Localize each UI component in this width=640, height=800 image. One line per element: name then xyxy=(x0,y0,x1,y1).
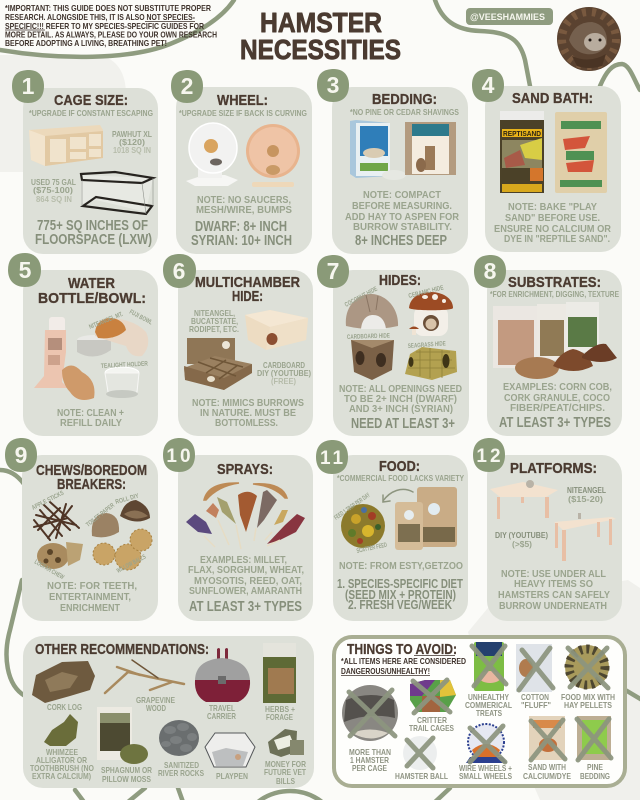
note: NOTE: COMPACT xyxy=(363,189,442,201)
badge 5: 5 xyxy=(19,257,32,283)
image: food pouches xyxy=(395,487,457,550)
heading xyxy=(38,275,146,307)
label: brands: BUCATSTATE, xyxy=(191,316,238,326)
subnote: *ALL ITEMS HERE ARE CONSIDERED xyxy=(341,657,466,666)
label: used tank xyxy=(31,177,76,204)
note: NOTE: MIMICS BURROWS xyxy=(192,397,304,409)
label: used tank: ($75-100) xyxy=(33,185,73,195)
note: NOTE: USE UNDER ALL xyxy=(501,568,606,580)
note: DYE IN "REPTILE SAND". xyxy=(504,233,610,245)
panel: 7 hides xyxy=(317,255,469,436)
label: money: FUTURE VET xyxy=(264,767,307,777)
key takeaway: FLOORSPACE (LXW) xyxy=(35,232,152,248)
label: treats xyxy=(465,692,512,718)
note xyxy=(188,554,304,597)
hide labels: COCONUT HIDE xyxy=(344,285,379,309)
label: carrier xyxy=(207,703,236,721)
note xyxy=(192,397,304,429)
label: grapevine: GRAPEVINE xyxy=(136,695,175,705)
image: play sand bag xyxy=(555,112,607,193)
badge 12: 12 xyxy=(476,446,504,467)
diet list: (SEED MIX + PROTEIN) xyxy=(345,588,456,602)
hide labels xyxy=(344,284,447,350)
heading: CHEWS/BOREDOM xyxy=(36,462,147,479)
label: wire wheels: WIRE WHEELS + xyxy=(459,763,512,773)
key takeaway: AT LEAST 3+ TYPES xyxy=(499,415,611,431)
badge 9: 9 xyxy=(15,442,27,468)
note: NOTE: CLEAN + xyxy=(57,407,124,419)
note: TO BE 2+ INCH (DWARF) xyxy=(344,393,457,405)
image: cardboard dividers xyxy=(184,338,252,390)
intro disclaimer text: SPECIFIC!!! REFER TO MY SPECIES-SPECIFIC GUIDES FOR xyxy=(5,22,204,31)
label: treats: UNHEALTHY xyxy=(468,692,509,702)
note: CORK GRANULE, COCO xyxy=(504,392,610,404)
badge 3: 3 xyxy=(327,72,339,98)
note: EXAMPLES: MILLET, xyxy=(200,554,287,566)
image: river rocks xyxy=(159,720,199,756)
subnote: *UPGRADE SIZE IF BACK IS CURVING xyxy=(179,108,307,118)
label: ball: HAMSTER BALL xyxy=(395,771,448,781)
label: money: MONEY FOR xyxy=(265,759,306,769)
label: more than one: PER CAGE xyxy=(352,763,387,773)
badge 3 xyxy=(317,69,349,102)
heading: CAGE SIZE: xyxy=(54,92,128,109)
panel: 9 chews xyxy=(5,438,158,621)
image: tealight holder xyxy=(105,367,139,398)
label: cardboard diy xyxy=(257,360,311,386)
label: cotton: COTTON xyxy=(521,692,549,702)
title: HAMSTER xyxy=(260,7,382,38)
heading: FOOD: xyxy=(379,458,420,475)
intro disclaimer text: *IMPORTANT: THIS GUIDE DOES NOT SUBSTITUTE PROPER xyxy=(5,4,211,13)
image: apple sticks xyxy=(34,502,79,540)
key takeaway: 775+ SQ INCHES OF xyxy=(37,218,148,234)
label: cotton: "FLUFF" xyxy=(521,700,551,710)
heading: WHEEL: xyxy=(217,92,268,109)
crossed item: hamster ball xyxy=(403,736,437,770)
heading: THINGS TO AVOID: xyxy=(347,641,457,658)
image: millet and grass sprays xyxy=(186,483,305,549)
label: moss xyxy=(101,765,152,784)
crossed item: multiple hamsters xyxy=(342,685,398,741)
label: pawhut: 1018 SQ IN xyxy=(113,145,151,155)
image: whimzee alligator xyxy=(44,714,78,746)
label: used tank: 864 SQ IN xyxy=(36,194,72,204)
note: MYOSOTIS, REED, OAT, xyxy=(194,575,302,587)
badge 8: 8 xyxy=(484,258,497,284)
hide labels: CARDBOARD HIDE xyxy=(347,332,391,341)
label: playpen: PLAYPEN xyxy=(216,771,248,781)
label: money xyxy=(264,759,307,786)
label: sand xyxy=(523,762,571,781)
intro disclaimer text: RESEARCH. ALONGSIDE THIS, IT IS ALSO NOT SPECIES- xyxy=(5,13,195,22)
label: cardboard diy: (FREE) xyxy=(271,376,296,386)
image: cork log xyxy=(32,661,95,703)
image: moss bag xyxy=(97,707,148,764)
image: reptisand bag: REPTISAND xyxy=(503,131,541,138)
image: paper bedding box xyxy=(350,120,406,180)
image: diy platform xyxy=(554,513,616,561)
label: brands xyxy=(189,308,239,334)
image: aspen bedding box xyxy=(405,122,456,175)
note: SUNFLOWER, AMARANTH xyxy=(189,585,302,597)
heading: OTHER RECOMMENDATIONS: xyxy=(35,641,209,658)
image: playpen xyxy=(205,733,255,767)
label: diy xyxy=(495,530,548,549)
badge 7: 7 xyxy=(327,258,339,284)
note xyxy=(57,407,124,429)
image: wooden wheel xyxy=(246,124,300,187)
image: bowl xyxy=(77,335,111,357)
note: NOTE: FROM ESTY,GETZOO xyxy=(339,560,463,572)
label: whimzee: ALLIGATOR OR xyxy=(36,755,87,765)
label: pine: PINE xyxy=(587,762,603,772)
key takeaway: SYRIAN: 10+ INCH xyxy=(191,233,292,249)
image: mushroom hide xyxy=(409,292,453,336)
note: BURROW STABILITY. xyxy=(353,221,452,233)
item labels: APPLE STICKS xyxy=(31,489,66,512)
label: grapevine xyxy=(136,695,175,713)
image: hamster at bowl xyxy=(95,318,148,356)
label: niteangel xyxy=(567,485,606,504)
label: cardboard diy: CARDBOARD xyxy=(263,360,305,370)
image: substrate piles xyxy=(515,344,617,379)
label: niteangel: ($15-20) xyxy=(568,494,603,504)
key takeaway: NEED AT LEAST 3+ xyxy=(351,416,455,432)
crossed item: calcium sand xyxy=(529,716,565,760)
note: NOTE: BAKE "PLAY xyxy=(508,201,597,213)
badge 11: 11 xyxy=(320,448,346,469)
diet list: 2. FRESH VEG/WEEK xyxy=(348,598,452,612)
label: tealight: TEALIGHT HOLDER xyxy=(101,361,148,370)
crossed item: cotton fluff xyxy=(516,644,553,692)
badge 7 xyxy=(317,255,349,288)
note xyxy=(345,189,459,233)
label: wire wheels: SMALL WHEELS xyxy=(459,771,512,781)
label: food mix: HAY PELLETS xyxy=(564,700,612,710)
note xyxy=(503,381,612,414)
badge 2 xyxy=(171,70,203,103)
label: diy: (>$5) xyxy=(512,539,532,549)
diet list: 1. SPECIES-SPECIFIC DIET xyxy=(337,577,463,591)
label: brands: NITEANGEL, xyxy=(194,308,235,318)
title xyxy=(240,7,401,65)
image: glass tank xyxy=(81,172,153,214)
label: more than one: MORE THAN xyxy=(349,747,391,757)
subnote: *UPGRADE IF CONSTANT ESCAPING xyxy=(29,108,153,118)
heading xyxy=(36,462,147,493)
badge 6 xyxy=(163,254,196,288)
label: food mix xyxy=(561,692,615,710)
label: herbs xyxy=(265,704,295,722)
handle tag: @VEESHAMMIES xyxy=(470,12,545,22)
label: cotton xyxy=(521,692,551,710)
heading: BOTTLE/BOWL: xyxy=(38,290,146,307)
badge 5 xyxy=(8,253,41,287)
heading: WATER xyxy=(68,275,115,292)
image: coconut hide xyxy=(346,294,398,329)
image: substrate bags xyxy=(493,302,599,368)
crossed item: wire wheel xyxy=(466,724,507,763)
label: scatter feed: SCATTER FEED xyxy=(356,542,388,555)
image: reptisand bag xyxy=(500,111,544,193)
note: NOTE: ALL OPENINGS NEED xyxy=(339,383,462,395)
title: NECESSITIES xyxy=(240,34,401,65)
panel: 3 bedding xyxy=(317,69,468,254)
note: EXAMPLES: CORN COB, xyxy=(503,381,612,393)
panel: 1 cage size xyxy=(12,70,158,254)
note: BURROW UNDERNEATH xyxy=(499,600,607,612)
heading: MULTICHAMBER xyxy=(195,274,300,291)
label: whimzee: EXTRA CALCIUM) xyxy=(32,771,91,781)
note: ENSURE NO CALCIUM OR xyxy=(494,223,611,235)
heading: HIDES: xyxy=(379,272,421,289)
label: brands: RODIPET, ETC. xyxy=(189,324,239,334)
note: SAND" BEFORE USE. xyxy=(505,212,600,224)
label: fuji bowl: NITEANGEL MT. xyxy=(88,311,124,331)
heading xyxy=(195,274,300,305)
panel: other recommendations xyxy=(23,636,314,788)
arrow xyxy=(383,489,413,502)
label: moss: PILLOW MOSS xyxy=(102,774,151,784)
heading: BEDDING: xyxy=(372,91,437,108)
image: hamster drinking xyxy=(62,365,94,400)
note xyxy=(339,383,462,415)
key takeaway xyxy=(191,219,292,249)
item labels: LOOFAH CHEW xyxy=(33,559,66,582)
image: cardboard box hide xyxy=(351,340,394,380)
crossed item: treats xyxy=(472,642,506,691)
image: herbs bag xyxy=(263,643,296,703)
label: pine: BEDDING xyxy=(580,771,610,781)
item labels xyxy=(31,489,148,582)
note: HAMSTERS CAN SAFELY xyxy=(498,589,610,601)
item labels: ROLL DIY xyxy=(115,492,140,506)
label: pawhut: PAWHUT XL xyxy=(112,129,152,139)
image: willow balls xyxy=(93,529,152,570)
handle tag xyxy=(466,8,553,25)
note: BOTTOMLESS. xyxy=(215,417,278,429)
panel: things to avoid xyxy=(334,637,625,786)
badge 9 xyxy=(5,438,37,472)
badge 11 xyxy=(316,440,348,474)
heading: HIDE: xyxy=(232,288,263,305)
image: travel carrier xyxy=(195,648,250,702)
note: HEAVY ITEMS SO xyxy=(514,578,593,590)
photo: hamster in burrow xyxy=(557,7,621,71)
heading: SAND BATH: xyxy=(512,90,593,107)
heading: PLATFORMS: xyxy=(510,460,597,477)
intro disclaimer text: BEFORE ADOPTING A LIVING, BREATHING PET! xyxy=(5,39,167,48)
label: more than one: 1 HAMSTER xyxy=(350,755,389,765)
crossed item: critter trail xyxy=(410,680,456,713)
label: herbs: FORAGE xyxy=(266,712,293,722)
note: ENTERTAINMENT, xyxy=(49,591,131,603)
note: MESH/WIRE, BUMPS xyxy=(196,204,292,216)
intro disclaimer text xyxy=(5,4,217,48)
label: whimzee: WHIMZEE xyxy=(46,747,78,757)
badge 12 xyxy=(473,438,505,472)
key takeaway: 8+ INCHES DEEP xyxy=(355,233,447,249)
image: loofah chew xyxy=(37,542,83,569)
badge 10: 10 xyxy=(166,446,194,467)
note: NOTE: NO SAUCERS, xyxy=(197,194,291,206)
label: diy: DIY (YOUTUBE) xyxy=(495,530,548,540)
label: pawhut: ($120) xyxy=(119,137,145,147)
badge 4: 4 xyxy=(482,72,495,98)
intro disclaimer text: MORE DETAIL. AS ALWAYS, PLEASE DO YOUR OWN RESEARCH xyxy=(5,30,217,40)
badge 10 xyxy=(163,438,195,472)
panel: 8 substrates xyxy=(474,255,622,436)
panel: 10 sprays xyxy=(163,438,313,621)
image: wooden hide xyxy=(245,310,308,350)
label: rocks: RIVER ROCKS xyxy=(158,768,204,778)
label: critter trail: CRITTER xyxy=(417,715,447,725)
heading: SUBSTRATES: xyxy=(508,274,601,291)
heading: SPRAYS: xyxy=(217,461,273,478)
panel: 12 platforms xyxy=(473,438,622,621)
label: wire wheels xyxy=(459,763,512,781)
label: fuji bowl continued: FUJI BOWL xyxy=(128,309,153,327)
image: grapevine wood xyxy=(105,660,184,693)
badge 1: 1 xyxy=(22,73,35,99)
note: REFILL DAILY xyxy=(60,417,122,429)
label: whimzee xyxy=(30,747,94,781)
subnote: DANGEROUS/UNHEALTHY! xyxy=(341,667,430,676)
note: IN NATURE. MUST BE xyxy=(200,407,296,419)
badge 1 xyxy=(12,70,44,103)
label: rocks xyxy=(158,760,204,778)
crossed item: hay pellets xyxy=(565,645,609,689)
image: water bottle stand xyxy=(34,317,68,388)
key takeaway: AT LEAST 3+ TYPES xyxy=(189,599,302,615)
label: cardboard diy: DIY (YOUTUBE) xyxy=(257,368,311,378)
label: treats: TREATS xyxy=(476,708,502,718)
label: critter trail: TRAIL CAGES xyxy=(409,723,454,733)
subnote: *COMMERCIAL FOOD LACKS VARIETY xyxy=(337,473,464,483)
item labels: TOILET PAPER xyxy=(85,502,116,529)
label: pawhut xyxy=(112,129,152,155)
image: corner platform xyxy=(490,480,558,519)
note: ENRICHMENT xyxy=(60,602,121,614)
key takeaway: DWARF: 8+ INCH xyxy=(195,219,287,235)
label: herbs: HERBS + xyxy=(265,704,295,714)
panel: 11 food xyxy=(316,440,468,621)
hide labels: SEAGRASS HIDE xyxy=(408,340,447,350)
note xyxy=(498,568,610,612)
diet list xyxy=(337,577,463,612)
label: used tank: USED 75 GAL xyxy=(31,177,76,187)
key takeaway xyxy=(35,218,152,248)
label: cork log: CORK LOG xyxy=(47,702,82,712)
note: NOTE: FOR TEETH, xyxy=(47,580,137,592)
badge 4 xyxy=(472,69,504,102)
heading: BREAKERS: xyxy=(57,476,126,493)
label: feed amount: FEED 1 TBSP PER DAY xyxy=(333,492,372,522)
image: white wheel xyxy=(186,123,238,186)
note: AND 3+ INCH (SYRIAN) xyxy=(349,403,453,415)
image: toilet paper rolls xyxy=(92,500,150,537)
label: treats: COMMERICAL xyxy=(465,700,512,710)
panel: 5 water xyxy=(8,253,158,436)
label: more than one xyxy=(349,747,391,773)
label: sand: CALCIUM/DYE xyxy=(523,771,571,781)
image: food mix xyxy=(341,504,385,548)
label: rocks: SANITIZED xyxy=(164,760,199,770)
label: grapevine: WOOD xyxy=(146,703,166,713)
badge 6: 6 xyxy=(173,258,185,284)
label: pine xyxy=(580,762,610,781)
label: moss: SPHAGNUM OR xyxy=(101,765,152,775)
note: BEFORE MEASURING. xyxy=(352,200,452,212)
item labels: WILLOW BALLS xyxy=(116,553,148,575)
label: food mix: FOOD MIX WITH xyxy=(561,692,615,702)
image: seagrass hide xyxy=(405,347,457,380)
image: money stacks xyxy=(268,729,304,757)
badge 2: 2 xyxy=(181,73,193,99)
label: niteangel: NITEANGEL xyxy=(567,485,606,495)
label: critter trail xyxy=(409,715,454,733)
note: FIBER/PEAT/CHIPS. xyxy=(510,402,605,414)
label: sand: SAND WITH xyxy=(528,762,566,772)
note: FLAX, SORGHUM, WHEAT, xyxy=(188,564,304,576)
subnote xyxy=(341,656,466,676)
hide labels: CERAMIC HIDE xyxy=(408,284,445,300)
subnote: *NO PINE OR CEDAR SHAVINGS xyxy=(350,107,459,117)
panel: 6 multichamber hide xyxy=(163,254,313,436)
panel: 4 sand bath xyxy=(472,69,621,252)
label: carrier: CARRIER xyxy=(207,711,236,721)
note xyxy=(47,580,137,614)
note xyxy=(494,201,611,245)
image: wooden cage xyxy=(29,125,103,166)
label: money: BILLS xyxy=(276,776,295,786)
note: ADD HAY TO ASPEN FOR xyxy=(345,211,459,223)
note xyxy=(196,194,292,216)
label: carrier: TRAVEL xyxy=(209,703,235,713)
badge 8 xyxy=(474,255,506,288)
panel: 2 wheel xyxy=(171,70,312,254)
label: whimzee: TOOTHBRUSH (NO xyxy=(30,763,94,773)
crossed item: pine bedding xyxy=(577,716,611,760)
